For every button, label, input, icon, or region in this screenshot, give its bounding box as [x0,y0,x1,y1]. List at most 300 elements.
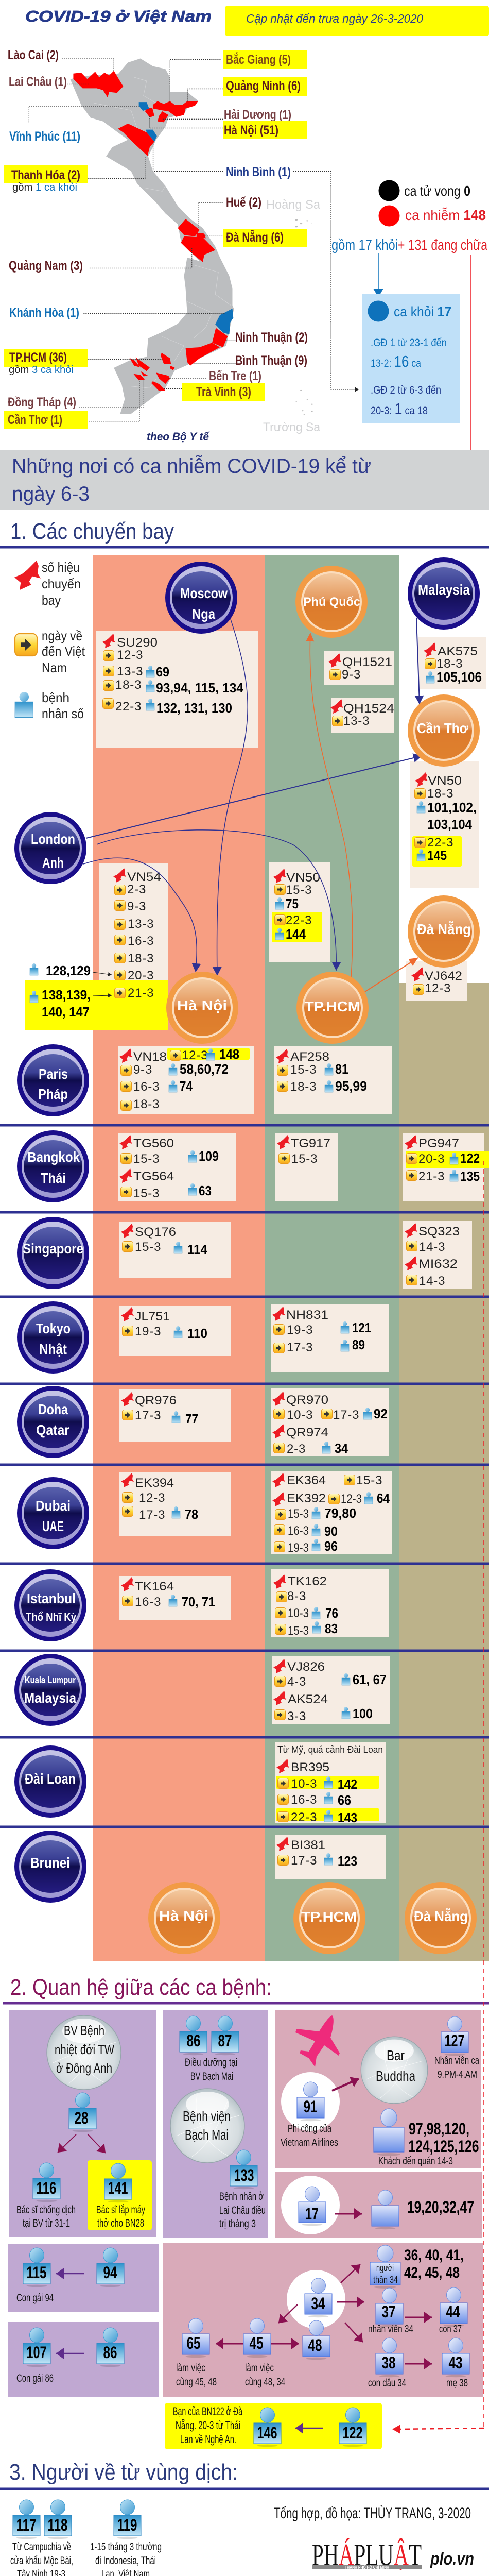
card: QH1521 [324,651,394,685]
node: Bangkok: Thái [41,1170,66,1186]
card: PG947: 21-3 [418,1170,445,1183]
node: Phú Quốc [295,566,368,638]
panel: patient 34 cluster: con dâu 34 [368,2377,406,2389]
province labels: Hải Dương (1) [224,108,291,122]
node: bottom TP.HCM: TP.HCM [301,1909,357,1925]
card: TG917: 15-3 [291,1152,318,1166]
province labels: Quảng Ninh (6) [226,79,301,93]
card: QR970 QR974: 10-3 [287,1408,313,1422]
card: BR395: 10-3 [291,1777,317,1791]
heading banner: ngày 6-3 [12,483,90,505]
card: SU290: 132, 131, 130 [156,700,232,716]
panel: Bạch Mai hospital: 133 [234,2166,254,2184]
panel: patient 34 cluster: con 37 [439,2324,462,2335]
panel: Bar Buddha: 127 [445,2031,464,2050]
province labels: TP.HCM (36) [9,350,67,365]
card: QR970 QR974 [271,1388,389,1456]
node: Bangkok [17,1130,89,1202]
panel: patient 34 cluster: 45 [249,2334,264,2352]
panel: patient 34 cluster: 42, 45, 48 [404,2264,460,2281]
card: SU290: SU290 [117,636,158,650]
card: QH1524: QH1524 [343,702,394,716]
node: London [14,812,86,884]
arrow: Malaysia to Cần Thơ [416,618,420,704]
panel: Bar Buddha: 97,98,120, [409,2120,469,2138]
card: QR970 QR974: 92 [374,1406,388,1421]
card: SU290: 13-3 [117,665,143,679]
panel: Bạch Mai hospital: 87 [218,2031,232,2050]
province labels: Bắc Giang (5) [226,52,291,67]
card: SU290: 69 [156,664,169,680]
node: London: London [31,831,75,847]
panel: patient 34 cluster: nhân viên 34 [368,2324,413,2335]
patients 117 and 118 [10,2500,73,2576]
callout: 122 and 146 [165,2403,382,2449]
legend: flights: nhân số [42,706,84,721]
card: PG947: 135 [460,1168,480,1184]
panel: Bạch Mai hospital: BV Bạch Mai [190,2071,233,2082]
heading: section 2: 2. Quan hệ giữa các ca bệnh: [10,1975,272,2000]
patients 117 and 118: 118 [47,2516,68,2534]
node: Dubai: UAE [42,1518,64,1534]
card: BI381: 17-3 [291,1854,317,1868]
callout: 122 and 146: 146 [257,2424,277,2442]
panel: patient 34 cluster: 34 [311,2294,325,2313]
callout: new cases VN54 21-3: 138,139, [42,987,91,1003]
panel: patient 34 cluster: 65 [186,2334,201,2352]
card: BR395: BR395 [291,1760,329,1774]
legend: flights: bay [42,592,61,608]
arrow: London to TP.HCM [97,830,336,971]
panel: Đông Anh hospital: Bác sĩ chống dịch [16,2204,76,2216]
card: VJ642: VJ642 [425,969,462,983]
panel: Đông Anh hospital: 116 [36,2179,57,2197]
card: BR395 [275,1742,386,1825]
panel: patient 34 cluster [163,2243,483,2397]
legend: deaths and infections: gồm 17 khỏi [331,237,398,253]
node: TP.HCM: TP.HCM [305,998,360,1014]
card: AK575: 18-3 [436,657,463,671]
card: BR395: 16-3 [291,1793,317,1807]
callout: new cases VN54 21-3: 140, 147 [42,1004,90,1020]
card: NH831: 19-3 [287,1323,313,1337]
node: Malaysia: Malaysia [418,582,470,598]
panel: Đông Anh hospital: BV Bệnh [64,2023,104,2038]
card: EK394: 12-3 [139,1491,165,1505]
node: Dubai: Dubai [36,1498,71,1514]
province labels: Cần Thơ (1) [8,413,62,427]
card: SQ323 MI632: 14-3 [419,1240,445,1254]
card: NH831 [271,1304,389,1372]
province labels: Thanh Hóa (2) [11,168,80,182]
node: bottom Hà Nội: Hà Nội [159,1908,208,1924]
card: SQ176: SQ176 [135,1225,176,1239]
node: Hà Nội [166,972,238,1044]
card: JL751: JL751 [135,1310,170,1324]
node: Kuala Lumpur: Kuala Lumpur [25,1675,76,1685]
card: VN18: 9-3 [133,1063,152,1077]
callout: 122 and 146: Lan về Nghệ An. [180,2433,236,2446]
card: SU290: 18-3 [115,678,142,692]
patients 117 and 118: 117 [16,2516,36,2534]
card: EK394: 78 [185,1506,198,1522]
card: BI381: 123 [338,1853,357,1869]
node: Paris [17,1044,89,1116]
arrow: dashed link PG947 to patient 122 [392,1161,484,2434]
arrow: Moscow to Hà Nội [217,619,248,976]
card: SQ176: 15-3 [135,1240,161,1254]
callout: 122 and 146: 122 [343,2424,362,2442]
card: VJ826 AK524: 61, 67 [353,1672,387,1687]
province labels [4,48,321,443]
card: TG560 TG564: 15-3 [133,1187,160,1200]
province labels: theo Bộ Y tế [147,430,211,443]
card: VJ826 AK524: AK524 [288,1692,328,1706]
callout: new cases VN54 21-3 [25,980,168,1030]
node: Kuala Lumpur [14,1654,86,1726]
panel: 86 and daughter: 107 [27,2343,46,2362]
legend: flights: chuyến [42,576,81,591]
card: VJ826 AK524: 3-3 [287,1709,306,1723]
card: TG560 TG564: 63 [199,1183,212,1198]
card: EK364 EK392: 16-3 [288,1524,309,1538]
panel: Bar Buddha: Buddha [376,2068,415,2084]
card: TK164: 70, 71 [182,1594,215,1609]
province labels: Lào Cai (2) [8,48,59,62]
card: VN50 to TP.HCM [269,862,330,962]
heading: section 3: 3. Người về từ vùng dịch: [9,2460,238,2485]
card: AF258: 15-3 [290,1063,317,1077]
node: Paris: Pháp [38,1086,68,1102]
node: Singapore [17,1217,89,1289]
card: BR395: Từ Mỹ, quá cảnh Đài Loan [277,1744,383,1755]
card: VN50 to Cần Thơ: 145 [427,848,447,863]
logo: Pháp Luật: plo.vn [430,2549,474,2569]
card: AF258 [274,1046,392,1114]
card: AF258: AF258 [290,1050,329,1064]
patient 119 [90,2500,162,2576]
legend: flights [14,560,85,721]
node: bottom TP.HCM [293,1882,365,1954]
province labels: gồm 1 ca khỏi [12,182,77,193]
card: SU290 [96,631,258,748]
card: VN54: 20-3 [128,969,154,982]
panel: Bạch Mai hospital: trị tháng 3 [219,2218,256,2230]
card: EK364 EK392: 15-3 [356,1473,382,1487]
card: VN18: 16-3 [133,1080,160,1094]
card: QR970 QR974: 2-3 [287,1442,306,1456]
card: JL751 [119,1306,231,1356]
card: VN18 [118,1046,254,1114]
panel: Bạch Mai hospital: Điều dưỡng tại [185,2057,237,2069]
card: TG560 TG564: 15-3 [133,1152,160,1166]
node: Doha: Doha [38,1401,68,1417]
card: TK162: 76 [325,1605,338,1621]
panel: patient 34 cluster: người [376,2263,394,2273]
card: VJ642: 12-3 [425,981,451,995]
card: AF258: 18-3 [290,1080,317,1094]
province labels: Trà Vinh (3) [196,385,251,399]
card: SQ323 MI632 [403,1221,472,1289]
panel: patient 34 cluster: 48 [308,2336,322,2354]
node: Doha [17,1386,89,1458]
card: QR970 QR974: 17-3 [333,1408,359,1422]
panel: Bạch Mai hospital: Lai Châu điều [219,2205,266,2216]
arrows: patients to VN54 dates [93,972,112,996]
card: EK364 EK392: 90 [324,1523,338,1539]
node: Tokyo: Nhật [39,1341,67,1357]
panel: recovered cases: 13-2: 16 ca [371,352,421,370]
card: AK575: AK575 [438,645,478,658]
card: TK162: 8-3 [287,1589,306,1603]
card: AK575 [418,637,486,689]
card: SQ323 MI632: 14-3 [419,1274,445,1288]
patients 117 and 118: cửa khẩu Mộc Bài, [10,2555,73,2567]
legend: flights: ngày về [42,628,82,643]
card: NH831: 89 [352,1337,365,1352]
card: VN50 to Cần Thơ [410,761,479,888]
card: VN50 to TP.HCM: 144 [286,926,306,942]
card: PG947 [403,1133,489,1201]
panel: patient 34 cluster: thân 34 [373,2275,398,2285]
flight table columns [0,555,489,1961]
node: Moscow [165,562,237,634]
card: VN54: 18-3 [128,952,154,965]
card: QR976: 77 [185,1411,198,1427]
panel: Đông Anh hospital: ở Đông Anh [56,2060,112,2076]
province labels: Hoàng Sa [266,198,321,212]
legend: flights: đến Việt [42,643,85,659]
panel: Bar Buddha: Vietnam Airlines [281,2137,338,2148]
panel: Bar Buddha [275,2010,481,2168]
panel: Bar Buddha: Khách đến quán 14-3 [378,2156,453,2167]
panel: 86 and daughter: 86 [103,2343,117,2362]
panel: 94 and daughter: Con gái 94 [16,2292,54,2304]
card: QH1521: 9-3 [342,668,361,682]
node: Brunei: Brunei [30,1855,70,1871]
card: QR970 QR974: 34 [335,1440,348,1456]
card: EK364 EK392: 79,80 [324,1505,356,1521]
card: EK394: 17-3 [139,1508,165,1522]
province labels: Huế (2) [226,195,261,210]
card: VJ826 AK524: VJ826 [287,1660,325,1674]
node: Istanbul [14,1569,86,1641]
card: VN54: VN54 [127,870,161,884]
card: SU290: 22-3 [115,700,142,714]
node: Cần Thơ: Cần Thơ [417,720,468,736]
card: VN18: 58,60,72 [180,1061,229,1077]
card: VN50 to TP.HCM: VN50 [286,871,320,885]
card: VN50 to Cần Thơ: 22-3 [427,836,453,850]
province labels: Đồng Tháp (4) [8,395,76,410]
panel: Bạch Mai hospital: 86 [186,2031,201,2050]
card: EK394 [119,1472,231,1536]
panel: Bar Buddha: 91 [304,2097,317,2116]
logo: Pháp Luật: PHÁPLUẬT [312,2538,422,2572]
panel: 86 and daughter [8,2322,159,2397]
province labels: Bình Thuận (9) [235,353,307,368]
panel: Bar Buddha: 9.PM-4.AM [438,2069,477,2080]
card: BR395: 143 [338,1810,357,1825]
node: Moscow: Moscow [180,585,228,601]
province labels: Đà Nẵng (6) [226,229,284,245]
patient 119: đi Indonesia, Thái [95,2555,156,2567]
card: TG917: TG917 [291,1137,330,1150]
card: PG947: 122 [460,1150,480,1166]
node: Moscow: Nga [192,606,215,622]
panel: recovered cases: .GĐ 1 từ 23-1 đến [371,337,447,349]
panel: patient 34 cluster: làm việc [245,2362,274,2374]
card: TK164 [119,1576,231,1620]
card: BR395: 22-3 [291,1810,317,1824]
panel: patient 34 cluster: 37 [382,2302,395,2321]
card: TG560 TG564 [118,1133,236,1201]
card: TK164: TK164 [135,1580,174,1594]
panel: Đông Anh hospital: thở cho BN28 [97,2217,144,2229]
panel: 86 and daughter: Con gái 86 [16,2372,54,2384]
card: VN50 to TP.HCM: 75 [286,896,299,911]
card: VN50 to TP.HCM: 22-3 [286,913,312,927]
card: QH1524: 13-3 [343,714,370,728]
card: QR970 QR974: QR974 [286,1426,328,1439]
node: Paris: Paris [39,1066,68,1082]
panel: patient 34 cluster: 38 [382,2353,395,2372]
node: bottom Đà Nẵng: Đà Nẵng [414,1908,468,1924]
arrow: recovered line [373,253,383,297]
card: EK364 EK392: 19-3 [288,1541,309,1555]
province labels: Hà Nội (51) [224,123,278,138]
card: VN18: 12-3 [182,1048,208,1062]
panel: patient 34 cluster: 43 [449,2353,462,2372]
card: VN18: 18-3 [133,1097,160,1111]
card: EK364 EK392: EK392 [287,1492,326,1505]
node: Doha: Qatar [36,1422,69,1438]
panel: Đông Anh hospital: Bác sĩ lắp máy [96,2204,145,2216]
card: AK575: 105,106 [436,669,482,685]
card: VN54: 9-3 [127,900,146,913]
heading banner [0,450,489,510]
node: Đài Loan: Đài Loan [25,1771,76,1787]
node: TP.HCM [296,972,369,1044]
card: EK364 EK392: 96 [324,1538,338,1554]
panel: Bar Buddha: Phi công của [288,2123,332,2134]
card: VN50 to Cần Thơ: 103,104 [427,817,472,832]
card: BI381: BI381 [291,1838,325,1852]
card: BR395: 142 [338,1776,357,1792]
panel: patient 17: 17 [305,2205,319,2223]
card: EK364 EK392 [271,1471,392,1555]
card: QH1521: QH1521 [342,655,392,669]
card: NH831: NH831 [286,1308,328,1322]
legend: flights: Nam [42,660,67,675]
legend: flights: số hiệu [42,560,80,575]
node: Đài Loan [14,1745,86,1818]
arrow: London to Hà Nội [83,858,197,972]
panel: 94 and daughter: 115 [27,2263,46,2282]
card: QH1524 [330,698,394,733]
panel: recovered cases: ca khỏi 17 [394,304,451,319]
node: Tokyo: Tokyo [36,1320,71,1336]
card: TG560 TG564: 109 [199,1148,219,1164]
patient 119: 119 [117,2516,137,2534]
province labels: Quảng Nam (3) [9,259,83,273]
card: EK364 EK392: 15-3 [288,1507,309,1521]
logo: Pháp Luật: THÀNH PHỐ HỒ CHÍ MINH [345,2565,389,2570]
card: JL751: 19-3 [135,1325,161,1338]
patient 119: 1-15 tháng 3 thường [90,2541,162,2553]
panel: patient 34 cluster: 44 [446,2302,460,2321]
card: NH831: 17-3 [287,1341,313,1354]
panel: patient 34 cluster: cùng 48, 34 [245,2376,285,2388]
callout: 122 and 146: Bạn của BN122 ở Đà [173,2405,242,2418]
card: PG947: PG947 [418,1137,459,1150]
panel: recovered cases: 20-3: 1 ca 18 [371,400,428,418]
card: SQ323 MI632: MI632 [418,1257,458,1271]
province labels: Trường Sa [263,420,321,434]
node: Hà Nội: Hà Nội [177,997,227,1013]
card: TK162: TK162 [288,1574,327,1588]
card: TK164: 16-3 [135,1595,161,1609]
card: VN54: 16-3 [128,934,154,948]
province labels: gồm 3 ca khỏi [9,364,74,376]
card: TG560 TG564: TG564 [133,1170,174,1183]
panel: Đông Anh hospital: 141 [108,2179,128,2197]
card: EK364 EK392: 12-3 [341,1492,362,1506]
node: Dubai [17,1477,89,1549]
province labels: Khánh Hòa (1) [9,306,79,320]
card: VN50 to Cần Thơ: VN50 [428,774,462,788]
panel: recovered cases: .GĐ 2 từ 6-3 đến [371,384,441,396]
panel: Bạch Mai hospital: Bạch Mai [185,2127,229,2143]
panel: Bar Buddha: Bar [387,2047,405,2063]
card: VN54: 13-3 [128,917,154,931]
node: Bangkok: Bangkok [27,1149,80,1165]
arrow: TP.HCM to Phú Quốc [310,633,353,977]
arrow: under treatment to banner [380,255,471,471]
node: bottom Đà Nẵng [405,1882,477,1954]
card: VN18: VN18 [133,1050,167,1064]
card: QR976: 17-3 [135,1409,161,1422]
province labels: Vĩnh Phúc (11) [9,129,80,144]
panel: 94 and daughter [8,2244,159,2312]
panel: Đông Anh hospital [9,2010,156,2237]
panel: 94 and daughter: 94 [103,2263,117,2282]
card: TG917 [275,1133,338,1201]
card: PG947: 20-3 [418,1152,445,1166]
card: QR976: QR976 [135,1394,177,1408]
card: VN54 [30,863,168,982]
update date banner: Cập nhật đến trưa ngày 26-3-2020 [246,12,423,25]
node: bottom Hà Nội [148,1882,220,1954]
card: TK162: 83 [325,1621,338,1636]
card: VN50 to Cần Thơ: 18-3 [427,787,453,801]
node: Malaysia [408,557,480,630]
node: London: Anh [42,855,64,871]
arrow: TP.HCM to Đà Nẵng [365,958,418,992]
card: NH831: 121 [352,1320,371,1335]
province labels: Lai Châu (1) [9,75,67,89]
legend: deaths and infections [331,180,488,253]
card: SQ323 MI632: SQ323 [418,1225,460,1239]
heading: section 1: 1. Các chuyến bay [10,519,174,544]
card: JL751: 110 [187,1326,207,1341]
panel: recovered cases [362,294,460,423]
card: VN50 to TP.HCM: 15-3 [286,883,312,897]
card: TG560 TG564: TG560 [133,1137,174,1150]
card: VJ826 AK524: 4-3 [287,1675,306,1689]
card: BR395: 66 [338,1792,351,1808]
node: Tokyo [17,1301,89,1374]
